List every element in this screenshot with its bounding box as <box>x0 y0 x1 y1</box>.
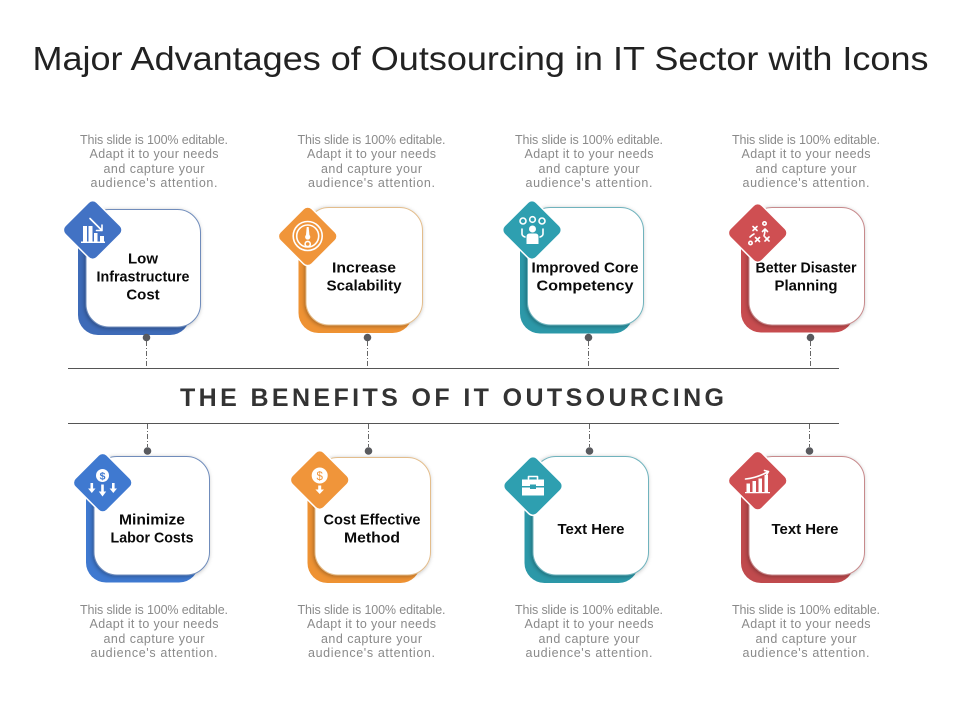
description text: bottom 3: Adapt it to your needs <box>524 617 654 631</box>
description text: top 3: This slide is 100% editable. <box>515 133 663 147</box>
label: Text Here <box>558 521 624 538</box>
description text: top 4: Adapt it to your needs <box>742 147 870 161</box>
description text: bottom 1: This slide is 100% editable. <box>80 603 228 617</box>
connector <box>806 424 813 455</box>
description text: bottom 1: and capture your <box>104 632 204 646</box>
description text: top 1: audience's attention. <box>90 176 218 190</box>
icon: person with ideas <box>500 198 564 262</box>
description text: bottom 2: This slide is 100% editable. <box>298 603 446 617</box>
label: Increase <box>332 260 396 276</box>
label: Labor Costs <box>110 530 194 546</box>
label <box>532 260 638 294</box>
description text: top 4 <box>732 133 880 190</box>
description text: bottom 4 <box>732 603 880 660</box>
label <box>96 250 190 304</box>
icon: briefcase <box>501 454 565 518</box>
card: Improved Core Competency <box>500 198 644 368</box>
description text: bottom 1: audience's attention. <box>90 646 218 660</box>
description text: bottom 3: audience's attention. <box>526 646 652 660</box>
label: Competency <box>536 278 634 294</box>
description text: bottom 4: and capture your <box>756 632 856 646</box>
description text: top 3: audience's attention. <box>526 176 652 190</box>
description text: top 4: audience's attention. <box>742 176 870 190</box>
description text: bottom 4: audience's attention. <box>742 646 870 660</box>
description text: bottom 2 <box>298 603 446 660</box>
label: Cost <box>126 286 160 304</box>
connector <box>365 424 372 455</box>
description text: bottom 4: This slide is 100% editable. <box>732 603 880 617</box>
card: Low Infrastructure Cost <box>61 198 201 368</box>
label <box>110 512 194 546</box>
connector <box>585 334 592 368</box>
connector <box>807 334 814 368</box>
description text: bottom 3: and capture your <box>538 632 640 646</box>
card: Better Disaster Planning <box>726 201 864 368</box>
label: Better Disaster <box>756 260 857 276</box>
description text: top 2: This slide is 100% editable. <box>298 133 446 147</box>
description text: top 3 <box>515 133 663 190</box>
icon: falling bar chart <box>61 198 125 262</box>
description text: bottom 3 <box>515 603 663 660</box>
description text: bottom 3: This slide is 100% editable. <box>515 603 663 617</box>
icon: money down: $ <box>100 470 106 482</box>
connector <box>144 424 151 455</box>
label: Improved Core <box>532 260 638 276</box>
connector <box>364 334 371 368</box>
card: Text Here (red) <box>726 424 864 583</box>
label <box>324 512 420 546</box>
description text: top 2 <box>298 133 446 190</box>
label <box>326 260 402 294</box>
description text: top 1: and capture your <box>104 162 204 176</box>
description text: bottom 2: and capture your <box>321 632 422 646</box>
description text: bottom 2: Adapt it to your needs <box>307 617 436 631</box>
icon: growth chart <box>726 449 790 513</box>
card: Cost Effective Method <box>288 424 430 583</box>
description text: bottom 1: Adapt it to your needs <box>90 617 218 631</box>
icon: play diagram <box>726 201 790 265</box>
description text: top 2: and capture your <box>321 162 422 176</box>
label: Planning <box>774 278 838 294</box>
description text: top 1: Adapt it to your needs <box>90 147 218 161</box>
icon: coin down: $ <box>316 471 323 483</box>
icon: coin down <box>288 448 352 512</box>
icon: money down <box>71 451 135 515</box>
description text: top 1: This slide is 100% editable. <box>80 133 228 147</box>
label: Scalability <box>326 278 402 294</box>
title: Major Advantages of Outsourcing in IT Sector with Icons <box>32 40 928 77</box>
description text: top 4: This slide is 100% editable. <box>732 133 880 147</box>
card: Increase Scalability <box>276 204 422 368</box>
label: Infrastructure <box>96 268 190 286</box>
description text: bottom 4: Adapt it to your needs <box>742 617 870 631</box>
label: Text Here <box>772 521 838 538</box>
description text: top 2: audience's attention. <box>308 176 435 190</box>
description text: top 4: and capture your <box>756 162 856 176</box>
connector <box>143 334 150 368</box>
description text: bottom 1 <box>80 603 228 660</box>
card: Minimize Labor Costs <box>71 424 210 582</box>
description text: top 3: Adapt it to your needs <box>524 147 654 161</box>
connector <box>586 424 593 455</box>
description text: top 2: Adapt it to your needs <box>307 147 436 161</box>
central banner: the benefits of IT outsourcing: THE BENEFITS OF IT OUTSOURCING <box>180 384 724 412</box>
label: Cost Effective <box>324 512 420 528</box>
label: Method <box>344 530 400 546</box>
label: Low <box>128 250 158 268</box>
description text: bottom 2: audience's attention. <box>308 646 435 660</box>
label: Minimize <box>119 512 185 528</box>
description text: top 1 <box>80 133 228 190</box>
card: Text Here (teal) <box>501 424 648 583</box>
label <box>756 260 857 294</box>
icon: gauge <box>276 204 340 268</box>
description text: top 3: and capture your <box>538 162 640 176</box>
